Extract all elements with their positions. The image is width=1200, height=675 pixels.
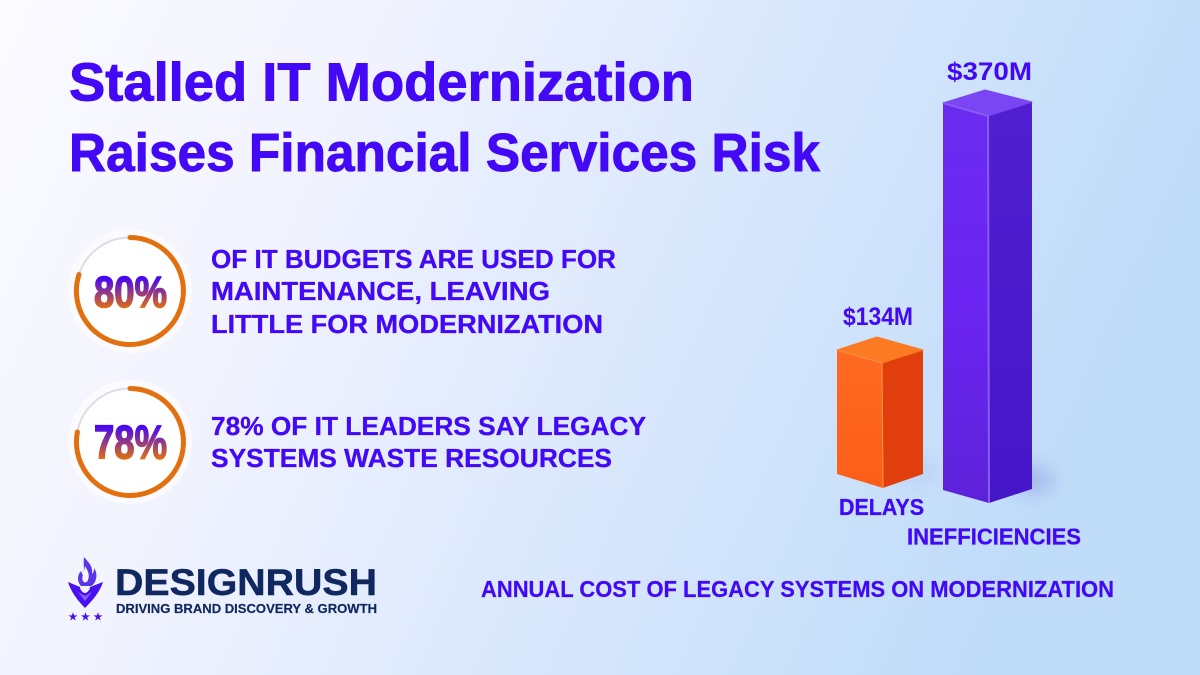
stat: 80% of IT budgets [68, 229, 616, 353]
stat text: 80%: MAINTENANCE, LEAVING [211, 276, 550, 306]
stat text: 78%: 78% OF IT LEADERS SAY LEGACY [211, 411, 646, 441]
progress ring: 78%: 78% [94, 416, 167, 468]
bar: inefficiencies $370M [943, 90, 1054, 503]
title: Raises Financial Services Risk [69, 123, 821, 183]
category label: inefficiencies: INEFFICIENCIES [907, 524, 1081, 550]
progress ring: 80% [68, 229, 192, 353]
stat text: 78% [211, 411, 646, 473]
logo wordmark: DESIGNRUSH [115, 562, 377, 603]
title: Stalled IT Modernization [69, 52, 694, 112]
stat: 78% of IT leaders [68, 380, 646, 504]
logo: DesignRush [68, 557, 377, 623]
stat text: 80%: OF IT BUDGETS ARE USED FOR [211, 244, 616, 274]
progress ring: 78% [68, 380, 192, 504]
bar chart: annual cost of legacy systems [481, 58, 1114, 602]
bar: delays $134M [837, 337, 936, 488]
value label: $134M: $134M [843, 303, 913, 331]
stat text: 80%: LITTLE FOR MODERNIZATION [211, 309, 603, 339]
icon: three stars [69, 612, 103, 623]
icon: flame and shield [68, 557, 103, 608]
chart caption: ANNUAL COST OF LEGACY SYSTEMS ON MODERNIZATION [481, 576, 1114, 602]
category label: delays: DELAYS [839, 494, 924, 520]
stat text: 78%: SYSTEMS WASTE RESOURCES [211, 443, 612, 473]
icon: three stars: ★ [81, 612, 90, 623]
stat text: 80% [211, 244, 616, 339]
title [69, 52, 821, 183]
icon: three stars: ★ [94, 612, 103, 623]
icon: three stars: ★ [69, 612, 78, 623]
value label: $370M: $370M [947, 58, 1032, 86]
progress ring: 80%: 80% [94, 268, 167, 317]
logo tagline: DRIVING BRAND DISCOVERY & GROWTH [116, 601, 377, 616]
